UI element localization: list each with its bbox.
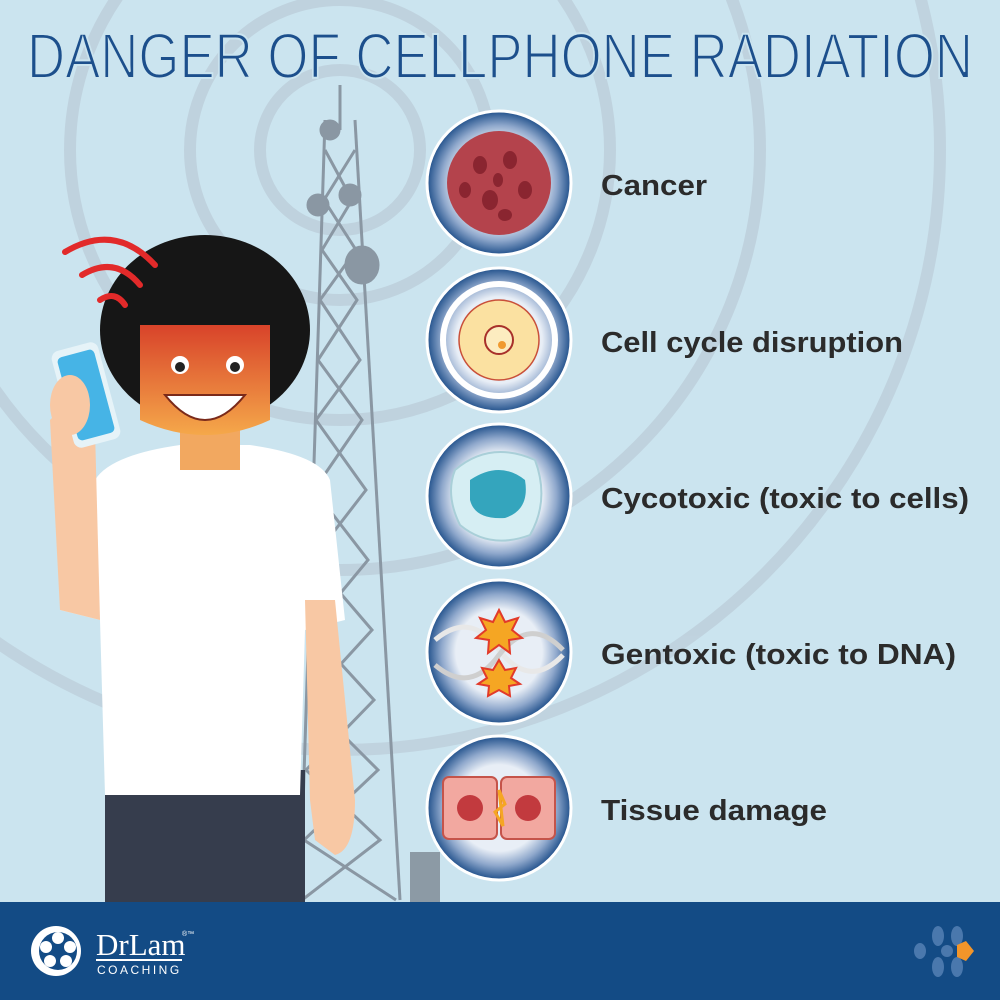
cell tower [300,85,400,900]
logo: COACHING [97,963,182,977]
footer [0,902,1000,1000]
phone [50,340,122,450]
radiation rings [0,0,940,750]
hand [50,375,90,435]
shirt [60,445,345,795]
item: cancer: Cancer [601,170,707,202]
item: cancer [427,111,707,255]
flower icon [914,926,974,977]
legs [105,770,305,905]
right arm [305,600,355,855]
logo: ®™ [182,930,194,938]
item: cell cycle disruption: Cell cycle disruption [601,327,903,359]
left arm raised [50,400,100,620]
item: tissue damage: Tissue damage [601,795,827,827]
logo: DrLam [96,927,186,962]
item: genotoxic: Gentoxic (toxic to DNA) [601,639,956,671]
hair [100,235,310,425]
person [50,235,355,905]
face [140,325,270,435]
logo [31,926,194,977]
building [410,852,440,907]
item: genotoxic [427,580,956,724]
item: tissue damage [427,736,827,880]
item: cytotoxic [427,424,969,568]
neck [180,430,240,470]
signal waves [65,240,155,305]
item: cell cycle disruption [427,268,903,412]
item: cytotoxic: Cycotoxic (toxic to cells) [601,483,969,515]
